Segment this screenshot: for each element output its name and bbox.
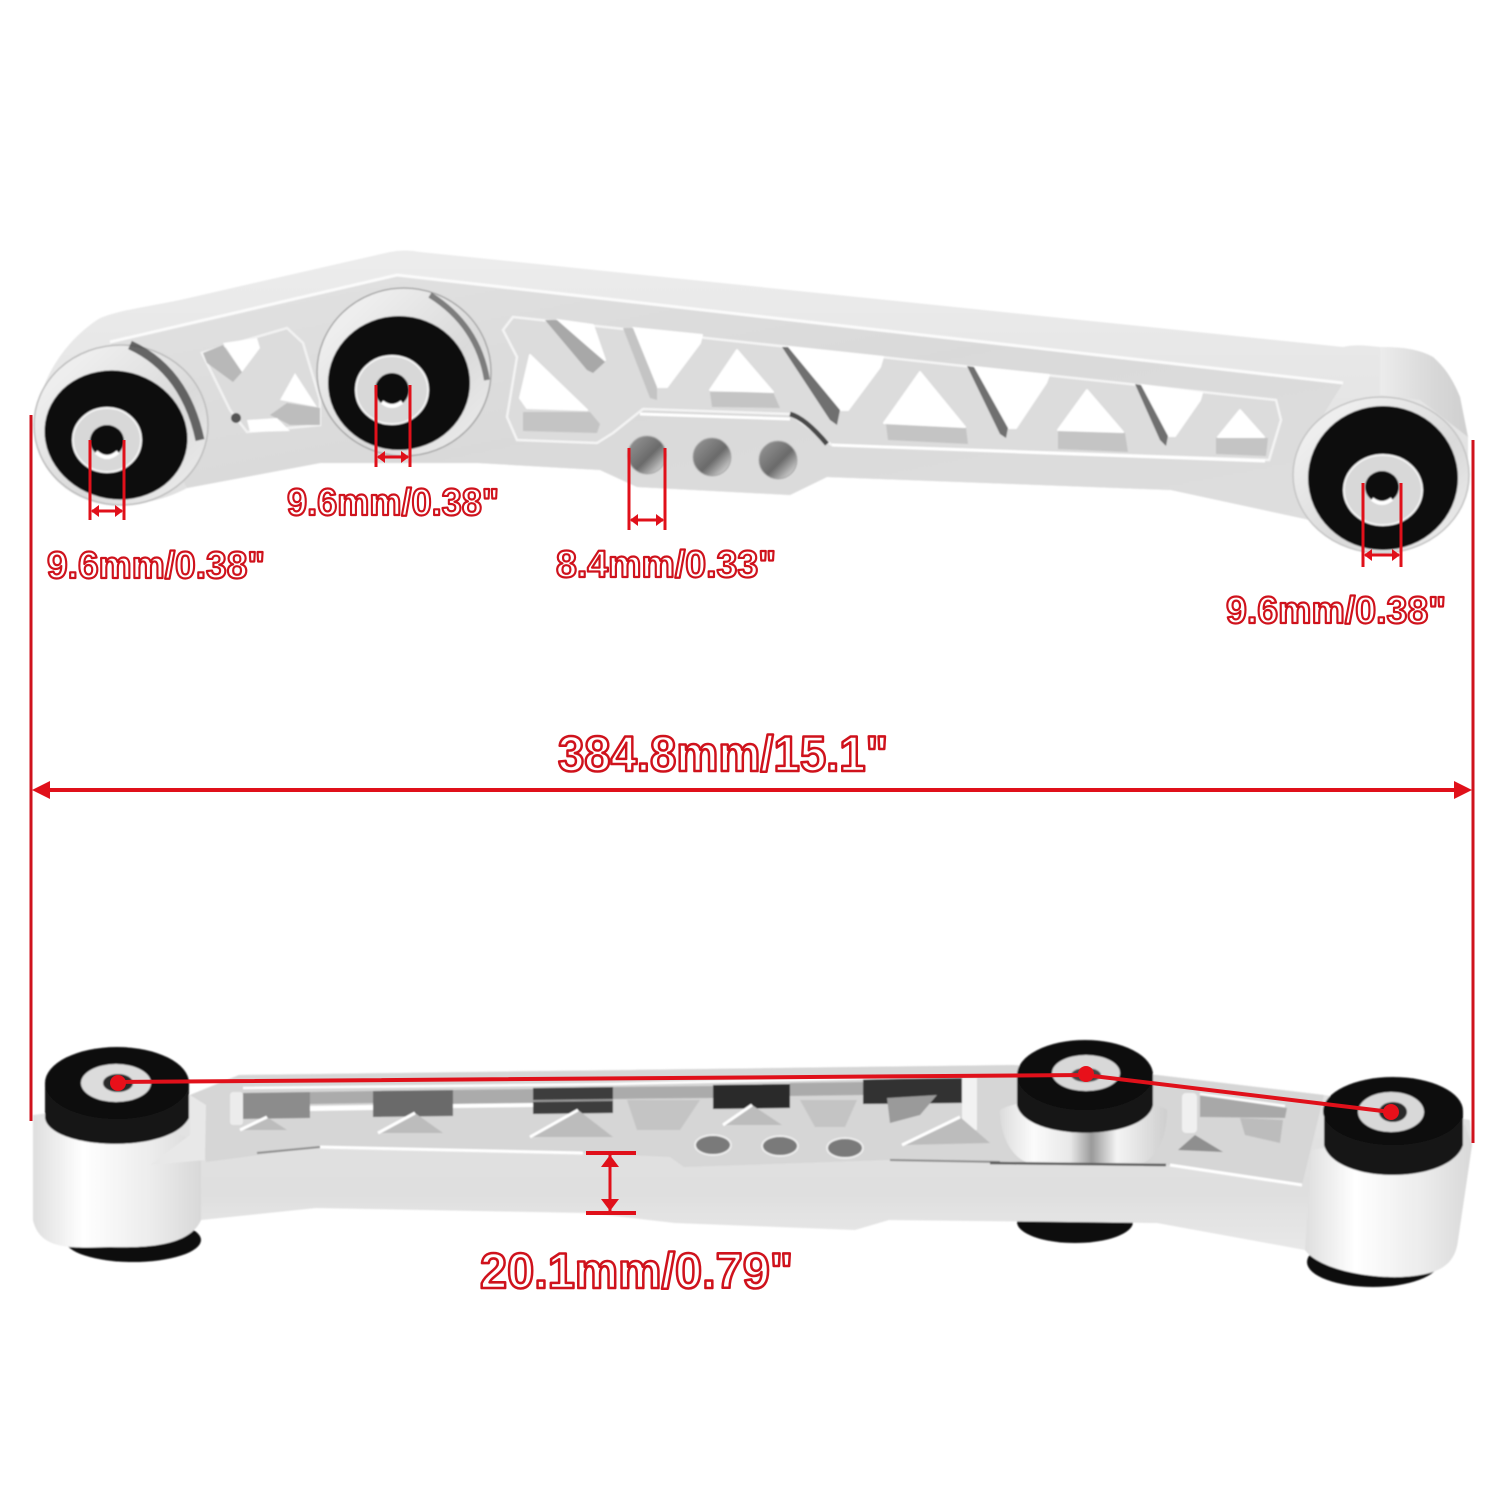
lip highlights xyxy=(640,414,1265,461)
arrow: thickness 20.1mm xyxy=(586,1151,636,1215)
left bushing top xyxy=(45,1047,189,1144)
lower edge shadows xyxy=(257,1147,1000,1162)
middle collar xyxy=(1000,1099,1167,1165)
bevel highlight xyxy=(110,275,1343,383)
middle bushing top xyxy=(1017,1040,1153,1133)
arrow: threaded hole 8.4mm xyxy=(629,448,665,530)
label: right bore: 9.6mm/0.38" xyxy=(1226,590,1446,632)
label: left bore: 9.6mm/0.38" xyxy=(47,545,265,587)
right bushing top xyxy=(1323,1077,1463,1175)
top control arm xyxy=(30,250,1469,553)
lip dark fold xyxy=(790,414,827,444)
lower rubber ends xyxy=(65,1201,1439,1287)
label: thickness: 20.1mm/0.79" xyxy=(480,1243,793,1299)
left cylinder body xyxy=(33,1115,201,1247)
lobe with three threaded holes xyxy=(628,436,797,479)
right end cap shading xyxy=(1380,347,1468,437)
label: overall length: 384.8mm/15.1" xyxy=(558,726,888,782)
left bushing xyxy=(30,345,208,515)
bottom control arm xyxy=(33,1040,1472,1287)
arrow: overall length 384.8mm xyxy=(32,781,1472,799)
arm silhouette xyxy=(33,1065,1472,1277)
dimension line: overall length right witness xyxy=(1472,440,1474,1143)
right cylinder body xyxy=(1305,1125,1472,1277)
lower edge highlights xyxy=(320,1147,1302,1185)
windows xyxy=(520,320,1264,437)
arm upper surface xyxy=(190,1065,1324,1185)
lower grey ledges xyxy=(523,392,1268,456)
right bushing xyxy=(1293,397,1469,553)
collar dark line xyxy=(990,1163,1166,1165)
left lattice pocket xyxy=(202,328,320,432)
left collar ring xyxy=(150,1095,206,1165)
right small pocket xyxy=(1178,1093,1287,1152)
dimension line: overall length left witness xyxy=(30,415,32,1121)
arm front face xyxy=(110,275,1343,520)
arm outer silhouette xyxy=(35,250,1468,553)
main lattice pocket xyxy=(503,317,1281,461)
pocket strips xyxy=(230,1076,990,1145)
red centre line across bushings xyxy=(110,1066,1399,1120)
arrow: left bore 9.6mm xyxy=(90,440,124,520)
label: middle bore: 9.6mm/0.38" xyxy=(287,482,499,524)
middle bushing xyxy=(317,288,491,456)
arrow: right bore 9.6mm xyxy=(1363,483,1401,567)
threaded holes xyxy=(695,1135,863,1158)
arrow: middle bore 9.6mm xyxy=(376,385,410,467)
window chamfers xyxy=(545,320,1168,446)
label: threaded hole: 8.4mm/0.33" xyxy=(556,544,776,586)
pocket triangles xyxy=(240,1105,990,1145)
